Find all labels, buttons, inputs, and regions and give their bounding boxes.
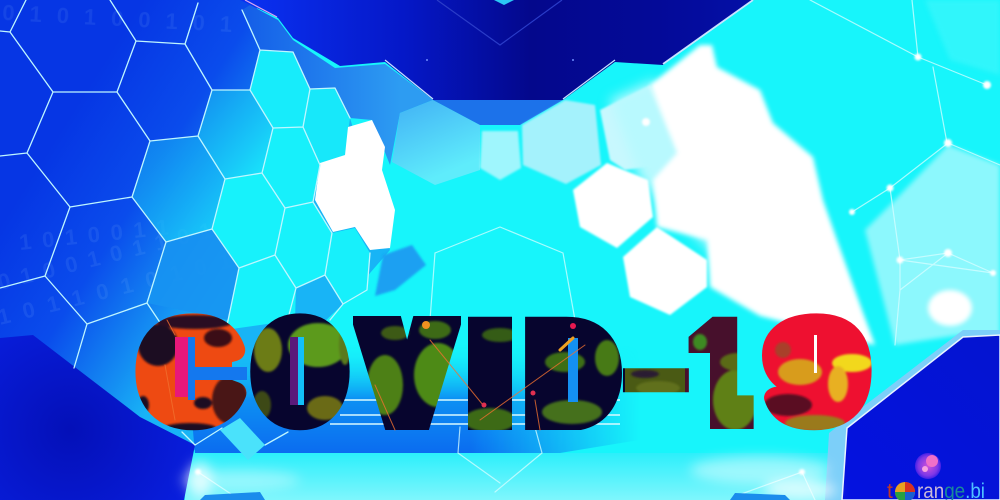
watermark: torange.biz [887,480,985,500]
title: COVID-19: C [141,298,239,447]
binary code texture: 1 0 1 1 0 1 0 1 0 1 [0,248,234,330]
title: COVID-19: 1 [690,300,748,449]
top band bright edges [245,0,753,99]
orange network lines over title [165,320,585,430]
small dots on top band [426,59,574,61]
title: COVID-19: 9 [770,298,864,447]
title: COVID-19: O [255,298,345,447]
title counters: filled letter bodies with narrow slits [172,330,838,415]
binary code texture: 0 1 0 0 1 0 1 1 0 1 [0,217,215,295]
panel: bottom-right dark blue cell [825,330,1000,500]
watermark bubble [915,453,941,479]
top band chevron outline [437,0,562,45]
title: COVID-19: - [621,295,691,444]
blue band beneath the title [193,357,630,453]
binary code texture: 0 1 0 1 0 0 1 0 1 [2,0,233,37]
panel: bottom-left dark blue cell [0,335,195,500]
panel: blue hexagon field, left [0,0,390,450]
horizontal light lines behind the title [330,400,620,424]
small blue rectangles at bottom edge [200,492,790,500]
binary code texture: 1 0 1 0 0 1 1 [18,214,170,255]
network glow nodes, right [195,54,996,475]
panel: top-right hexagon pale panels [865,0,1000,345]
white hexagon cells [315,120,972,326]
panel: top dark blue band [240,0,753,100]
hexagon outlines, left [0,0,370,445]
pale wash around white area [610,80,720,260]
title: COVID-19: D [527,300,617,449]
title: COVID-19 [135,313,872,430]
pale wash below the center cells [185,453,835,500]
diamond at top center [494,0,514,5]
panel: translucent blue cells below top band [242,5,672,296]
light streak on bottom-left of title [220,418,265,460]
white glow area, right of center [650,45,875,345]
bottom glow highlights [180,456,836,500]
title: COVID-19: V [370,300,444,449]
title: COVID-19: I [470,300,510,449]
panel: cyan hexagon cells [132,50,370,330]
binary code texture [0,0,234,330]
